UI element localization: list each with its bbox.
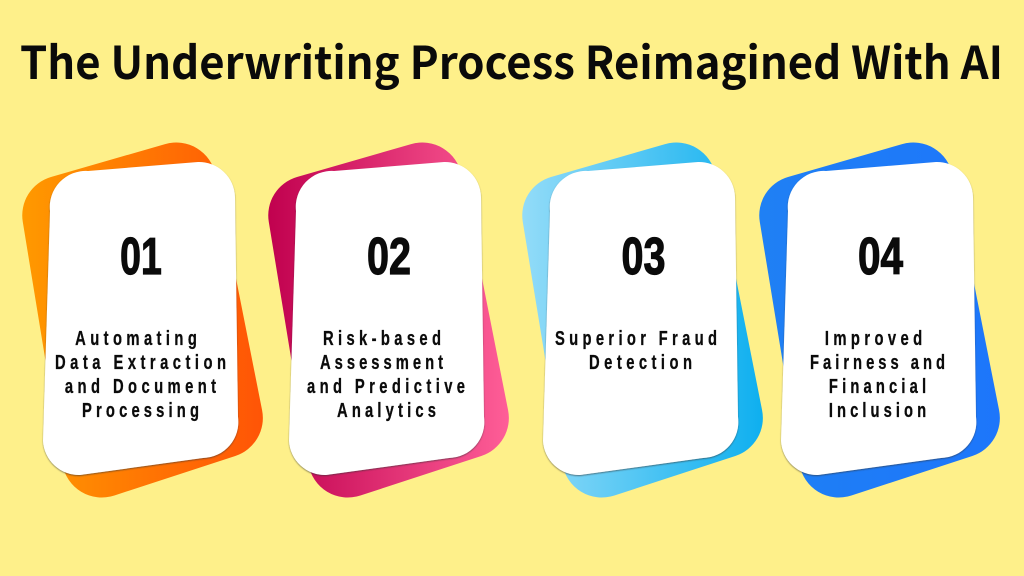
- card 04 number: 04: [858, 227, 903, 285]
- card 04 label: Fairness and: [810, 351, 945, 374]
- panel: card 02: [268, 143, 509, 498]
- card 03 label: [555, 327, 717, 374]
- card 04 label: Inclusion: [829, 399, 926, 422]
- panel: card 03: [522, 143, 763, 498]
- card 01 label: [55, 327, 226, 422]
- card 01 backing shape: [22, 143, 263, 498]
- card 02 label: Analytics: [337, 399, 436, 422]
- card 02 label: and Predictive: [307, 375, 465, 398]
- card 02 backing shape: [268, 143, 509, 498]
- card 02 label: [307, 327, 465, 422]
- card 02 label: Risk-based: [323, 327, 441, 350]
- card 04 white face: [781, 162, 976, 475]
- card 02 white face: [289, 162, 484, 475]
- card 04 label: Financial: [829, 375, 926, 398]
- card 03 number: 03: [622, 227, 665, 285]
- card 04 backing shape: [759, 143, 1000, 498]
- title: The Underwriting Process Reimagined With AI: [20, 27, 1003, 92]
- card 03 backing shape: [522, 143, 763, 498]
- card 04 label: Improved: [825, 327, 922, 350]
- card 04 label: [810, 327, 945, 422]
- card 02 label: Assessment: [320, 351, 443, 374]
- card 01 label: Processing: [82, 399, 199, 422]
- card 01 label: and Document: [65, 375, 216, 398]
- panel: card 01: [22, 143, 263, 498]
- card 03 label: Superior Fraud: [555, 327, 717, 350]
- panel: card 04: [759, 143, 1000, 498]
- card 01 label: Automating: [75, 327, 197, 350]
- card 01 number: 01: [120, 227, 162, 285]
- card 01 label: Data Extraction: [55, 351, 226, 374]
- card 02 number: 02: [367, 227, 411, 285]
- card 03 label: Detection: [589, 351, 692, 374]
- card 03 white face: [543, 162, 738, 475]
- card 01 white face: [43, 162, 238, 475]
